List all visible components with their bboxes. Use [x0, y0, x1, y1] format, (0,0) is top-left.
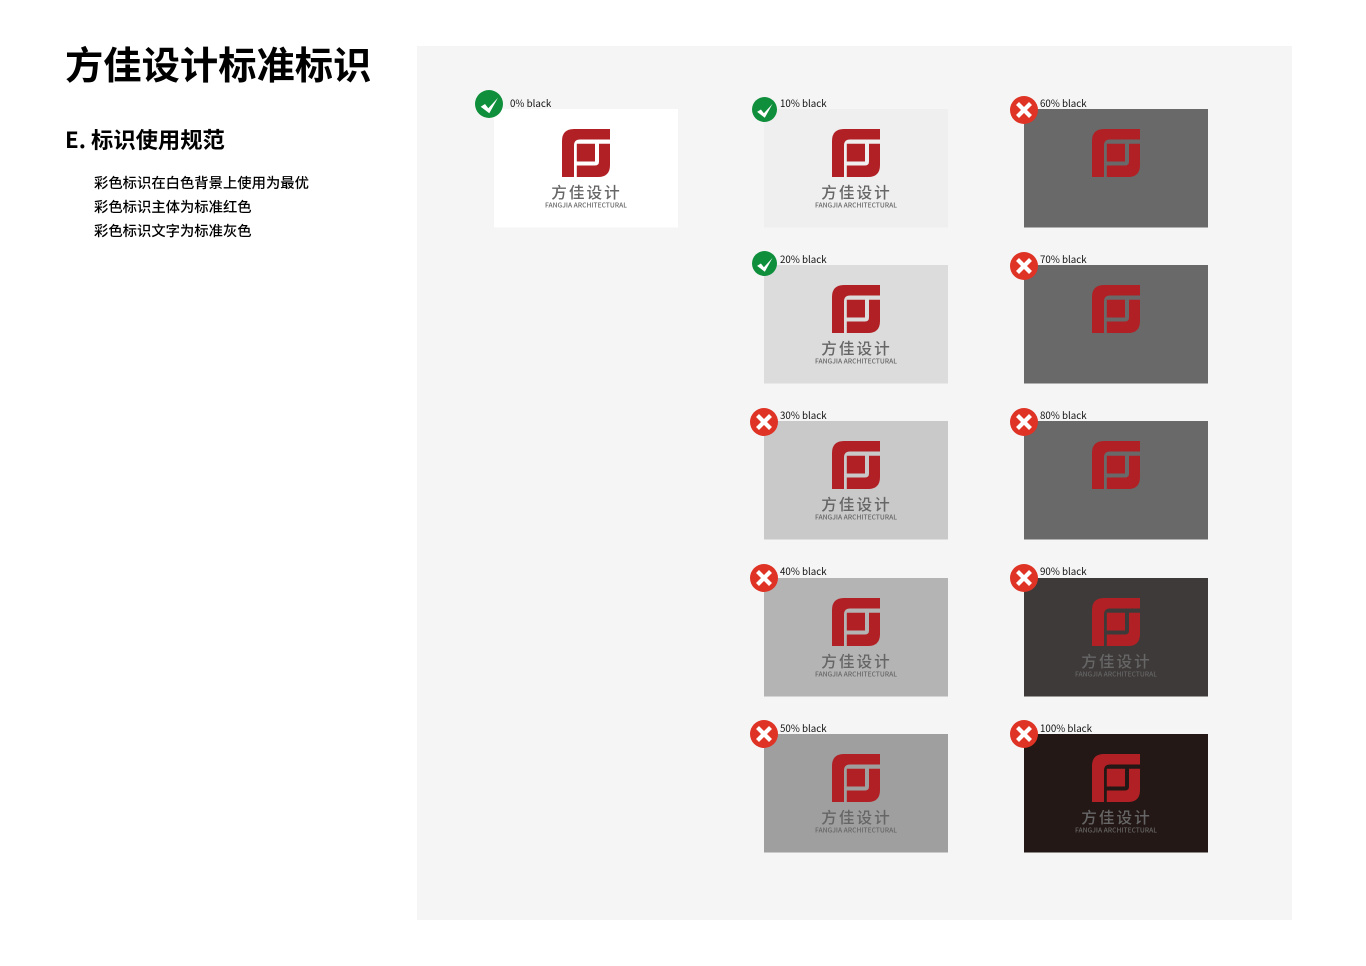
- card: 90% black, rejected: [1010, 564, 1208, 696]
- card: 80% black, rejected: [1010, 408, 1208, 540]
- card: 0% black, approved: 0% black: [510, 96, 551, 110]
- usage notes: [94, 172, 309, 241]
- card: 0% black, approved: [475, 90, 678, 228]
- card: 40% black, rejected: [750, 564, 948, 696]
- card: 30% black, rejected: 方佳设计: [821, 493, 892, 515]
- card: 10% black, approved: [752, 96, 897, 210]
- card: 50% black, rejected: FANGJIA ARCHITECTURAL: [815, 824, 897, 834]
- card: 20% black, approved: 方佳设计: [821, 337, 892, 359]
- usage notes: 彩色标识文字为标准灰色: [94, 220, 252, 241]
- card: 100% black, rejected: 100% black: [1040, 721, 1092, 735]
- card: 50% black, rejected: 50% black: [780, 721, 827, 735]
- card: 30% black, rejected: [750, 408, 948, 540]
- card: 40% black, rejected: 40% black: [780, 564, 827, 578]
- card: 90% black, rejected: 90% black: [1040, 564, 1087, 578]
- card: 90% black, rejected: 方佳设计: [1081, 650, 1152, 672]
- card: 90% black, rejected: FANGJIA ARCHITECTURAL: [1075, 668, 1157, 678]
- card: 10% black, approved: 方佳设计: [821, 181, 892, 203]
- card: 80% black, rejected: 80% black: [1040, 408, 1087, 422]
- section heading: E. 标识使用规范: [65, 123, 225, 155]
- panel: logo background tests: [417, 46, 1292, 920]
- card: 20% black, approved: [752, 251, 948, 384]
- title: 方佳设计标准标识: [65, 36, 371, 90]
- card: 70% black, rejected: 70% black: [1040, 252, 1087, 266]
- card: 50% black, rejected: 方佳设计: [821, 806, 892, 828]
- card: 60% black, rejected: [1010, 96, 1208, 228]
- card: 20% black, approved: 20% black: [780, 252, 827, 266]
- card: 100% black, rejected: FANGJIA ARCHITECTURAL: [1075, 824, 1157, 834]
- usage notes: 彩色标识在白色背景上使用为最优: [94, 172, 309, 193]
- card: 40% black, rejected: 方佳设计: [821, 650, 892, 672]
- card: 20% black, approved: FANGJIA ARCHITECTURAL: [815, 356, 897, 366]
- card: 60% black, rejected: 60% black: [1040, 96, 1087, 110]
- card: 10% black, approved: 10% black: [780, 96, 827, 110]
- card: 30% black, rejected: FANGJIA ARCHITECTURAL: [815, 512, 897, 522]
- card: 30% black, rejected: 30% black: [780, 408, 827, 422]
- card: 50% black, rejected: [750, 720, 948, 852]
- card: 100% black, rejected: [1010, 720, 1208, 852]
- card: 10% black, approved: FANGJIA ARCHITECTURAL: [815, 200, 897, 210]
- card: 40% black, rejected: FANGJIA ARCHITECTURAL: [815, 668, 897, 678]
- card: 70% black, rejected: [1010, 252, 1208, 384]
- usage notes: 彩色标识主体为标准红色: [94, 196, 252, 217]
- card: 0% black, approved: 方佳设计: [551, 181, 622, 203]
- card: 0% black, approved: FANGJIA ARCHITECTURAL: [545, 200, 627, 210]
- card: 100% black, rejected: 方佳设计: [1081, 806, 1152, 828]
